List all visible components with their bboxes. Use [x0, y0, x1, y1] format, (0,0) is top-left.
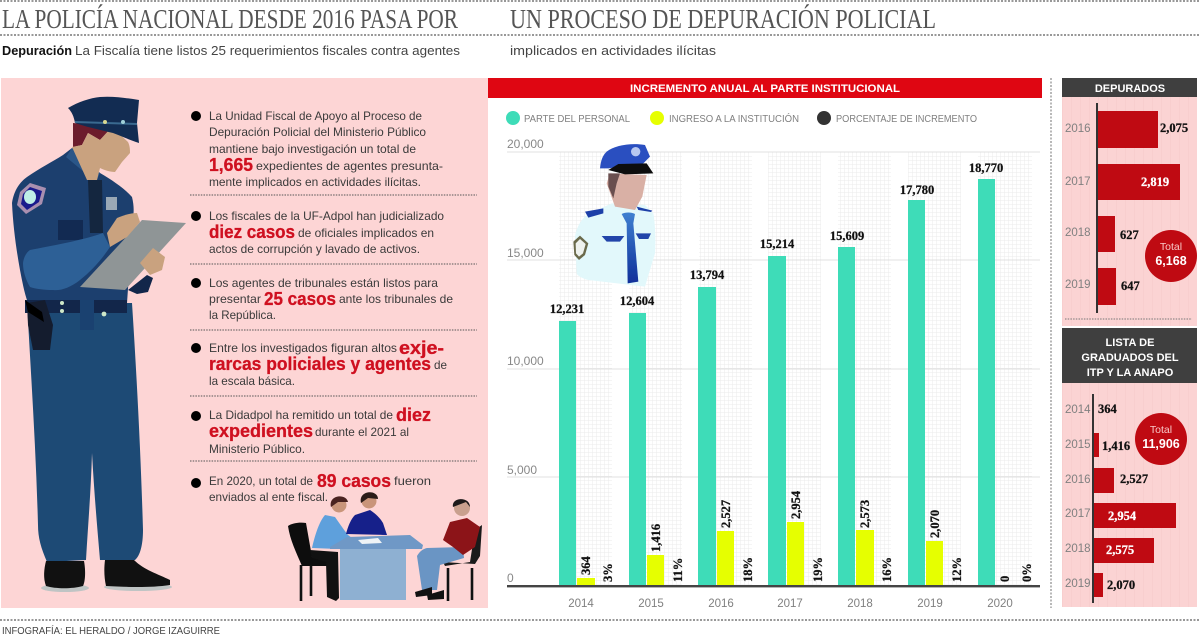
- total badge: [1145, 230, 1197, 282]
- y axis labels: 20,000: [507, 137, 544, 151]
- bullet text: 1,665 expedientes: [191, 109, 443, 189]
- panel: depurados: [1062, 78, 1197, 326]
- percent values: [601, 557, 1034, 582]
- horizontal bars: 2019: [1065, 279, 1091, 291]
- teal bar values: 12,604: [620, 294, 655, 308]
- subtitle: Depuración: [2, 43, 72, 58]
- horizontal bars: 647: [1121, 279, 1140, 293]
- yellow bar values: 2,527: [719, 500, 733, 528]
- y axis labels: 0: [507, 571, 514, 585]
- subtitle: implicados en actividades ilícitas: [510, 43, 717, 58]
- horizontal bars: 2014: [1065, 404, 1091, 416]
- teal bar values: 13,794: [690, 268, 725, 282]
- horizontal bars: 2018: [1065, 543, 1091, 555]
- bullet text: diez casos: [191, 209, 444, 256]
- legend: [506, 111, 977, 125]
- horizontal bars: 1,416: [1102, 439, 1130, 453]
- bullet text: 1,665 expedientes: Depuración Policial del Ministerio Público: [209, 125, 426, 139]
- bullet text: 1,665 expedientes: mente implicados en actividades ilícitas.: [209, 175, 421, 189]
- icon: police officer: [12, 97, 186, 592]
- horizontal bars: 2,075: [1160, 121, 1188, 135]
- legend: PARTE DEL PERSONAL: [524, 113, 630, 125]
- percent values: 16%: [880, 557, 894, 582]
- heading: LISTA DE: [1106, 337, 1154, 349]
- year labels: 2018: [847, 598, 873, 610]
- year labels: 2017: [777, 598, 803, 610]
- bullet text: 25 casos: Los agentes de tribunales están listos para: [209, 276, 438, 290]
- y axis labels: [507, 137, 544, 585]
- y axis labels: 5,000: [507, 463, 537, 477]
- y axis labels: 10,000: [507, 354, 544, 368]
- bullet text: diez expedientes: [191, 405, 431, 456]
- panel: texto y policía: [1, 78, 488, 608]
- bar chart: [507, 137, 1040, 610]
- heading: [1062, 78, 1197, 97]
- bullet text: exjerarcas: de: [434, 358, 447, 372]
- teal bar values: 18,770: [969, 161, 1003, 175]
- yellow bar values: 1,416: [649, 524, 663, 552]
- bullet text: 89 casos: [191, 471, 431, 504]
- horizontal bars: 2019: [1065, 578, 1091, 590]
- bullet text: diez expedientes: La Didadpol ha remitido un total de: [209, 408, 393, 422]
- bullet text: diez expedientes: expedientes: [209, 421, 313, 441]
- horizontal bars: 2016: [1065, 123, 1091, 135]
- total badge: Total: [1150, 424, 1172, 436]
- percent values: 11%: [671, 558, 685, 582]
- chart header: [488, 78, 1042, 98]
- bullet text: diez expedientes: diez: [396, 405, 431, 425]
- icon: officer bust: [573, 144, 655, 287]
- bullet text: diez casos: Los fiscales de la UF-Adpol han judicializado: [209, 209, 444, 223]
- percent values: 0%: [1020, 563, 1034, 582]
- year labels: 2015: [638, 598, 664, 610]
- legend: PORCENTAJE DE INCREMENTO: [836, 113, 977, 125]
- percent values: 3%: [601, 563, 615, 582]
- subtitle: [2, 43, 717, 58]
- year labels: 2020: [987, 598, 1013, 610]
- title: LA POLICÍA NACIONAL DESDE 2016 PASA POR: [2, 4, 458, 34]
- horizontal bars: 2,819: [1141, 175, 1169, 189]
- horizontal bars: [1065, 103, 1188, 313]
- bullet text: 89 casos: fueron: [394, 474, 431, 488]
- teal bars: [559, 179, 995, 586]
- bullet text: 1,665 expedientes: 1,665: [209, 155, 253, 175]
- bullet text: diez casos: de oficiales implicados en: [298, 226, 434, 240]
- bullet text: diez casos: diez casos: [209, 222, 295, 242]
- total badge: Total: [1160, 241, 1182, 253]
- y axis labels: 15,000: [507, 246, 544, 260]
- total badge: 11,906: [1142, 437, 1180, 451]
- horizontal bars: 364: [1098, 402, 1118, 416]
- bullet text: diez expedientes: durante el 2021 al: [315, 425, 409, 439]
- title: [2, 4, 936, 34]
- horizontal bars: 2,527: [1120, 472, 1148, 486]
- bullet text: 1,665 expedientes: expedientes de agentes presunta-: [256, 159, 443, 173]
- horizontal bars: 2015: [1065, 439, 1091, 451]
- horizontal bars: 627: [1120, 228, 1139, 242]
- legend: INGRESO A LA INSTITUCIÓN: [669, 112, 799, 125]
- yellow bar values: 0: [998, 576, 1012, 582]
- bullet text: 25 casos: ante los tribunales de: [339, 292, 453, 306]
- bullet text: diez casos: actos de corrupción y lavado de activos.: [209, 242, 420, 256]
- bullet text: 25 casos: [191, 276, 453, 322]
- bullet text: exjerarcas: [191, 338, 447, 388]
- bullet text: 89 casos: enviados al ente fiscal.: [209, 490, 328, 504]
- yellow bar values: 2,954: [789, 490, 803, 519]
- percent values: 19%: [811, 557, 825, 582]
- horizontal bars: 2017: [1065, 508, 1091, 520]
- bullet text: exjerarcas: rarcas policiales y agentes: [209, 354, 431, 374]
- yellow bar values: 2,070: [928, 510, 942, 538]
- horizontal bars: 2016: [1065, 474, 1091, 486]
- title: UN PROCESO DE DEPURACIÓN POLICIAL: [510, 4, 936, 34]
- teal bar values: 17,780: [900, 183, 934, 197]
- year labels: 2016: [708, 598, 734, 610]
- panel: lista de graduados: [1062, 328, 1197, 607]
- heading: DEPURADOS: [1095, 83, 1165, 95]
- horizontal bars: 2,954: [1108, 509, 1137, 523]
- bullet text: 25 casos: presentar: [209, 292, 261, 306]
- yellow bar values: 364: [579, 556, 593, 575]
- chart header: INCREMENTO ANUAL AL PARTE INSTITUCIONAL: [630, 83, 900, 95]
- bullet text: 25 casos: la República.: [209, 308, 276, 322]
- bullet text: exjerarcas: Entre los investigados figuran altos: [209, 341, 397, 355]
- yellow bar values: 2,573: [858, 500, 872, 528]
- yellow bar values: [579, 490, 1012, 582]
- horizontal bars: [1065, 394, 1176, 603]
- total badge: [1135, 413, 1187, 465]
- heading: ITP Y LA ANAPO: [1087, 367, 1174, 379]
- credit: INFOGRAFÍA: EL HERALDO / JORGE IZAGUIRRE: [2, 624, 220, 637]
- percent values: 18%: [741, 557, 755, 582]
- total badge: 6,168: [1155, 254, 1187, 268]
- heading: GRADUADOS DEL: [1081, 352, 1179, 364]
- teal bar values: 15,609: [830, 229, 864, 243]
- yellow bars: [577, 522, 943, 586]
- bullet text: exjerarcas: exje-: [399, 338, 444, 358]
- bullet text: 89 casos: En 2020, un total de: [209, 474, 313, 488]
- bullet text: 89 casos: 89 casos: [317, 471, 391, 491]
- horizontal bars: 2017: [1065, 176, 1091, 188]
- horizontal bars: 2018: [1065, 227, 1091, 239]
- horizontal bars: 2,575: [1106, 543, 1134, 557]
- icon: interrogation scene: [288, 492, 482, 601]
- bullet text: exjerarcas: la escala básica.: [209, 374, 295, 388]
- subtitle: La Fiscalía tiene listos 25 requerimientos fiscales contra agentes: [75, 43, 461, 58]
- teal bar values: 12,231: [550, 302, 584, 316]
- bullet text: 1,665 expedientes: La Unidad Fiscal de Apoyo al Proceso de: [209, 109, 422, 123]
- heading: [1062, 328, 1197, 383]
- bullet text: 1,665 expedientes: mantiene bajo investigación un total de: [209, 142, 416, 156]
- year labels: [568, 598, 1013, 610]
- year labels: 2019: [917, 598, 943, 610]
- bullet text: 25 casos: 25 casos: [264, 289, 336, 309]
- teal bar values: 15,214: [760, 237, 795, 251]
- year labels: 2014: [568, 598, 594, 610]
- panel: incremento anual: [488, 78, 1042, 610]
- bullet text: diez expedientes: Ministerio Público.: [209, 442, 305, 456]
- percent values: 12%: [950, 557, 964, 582]
- horizontal bars: 2,070: [1107, 578, 1135, 592]
- teal bar values: [550, 161, 1003, 316]
